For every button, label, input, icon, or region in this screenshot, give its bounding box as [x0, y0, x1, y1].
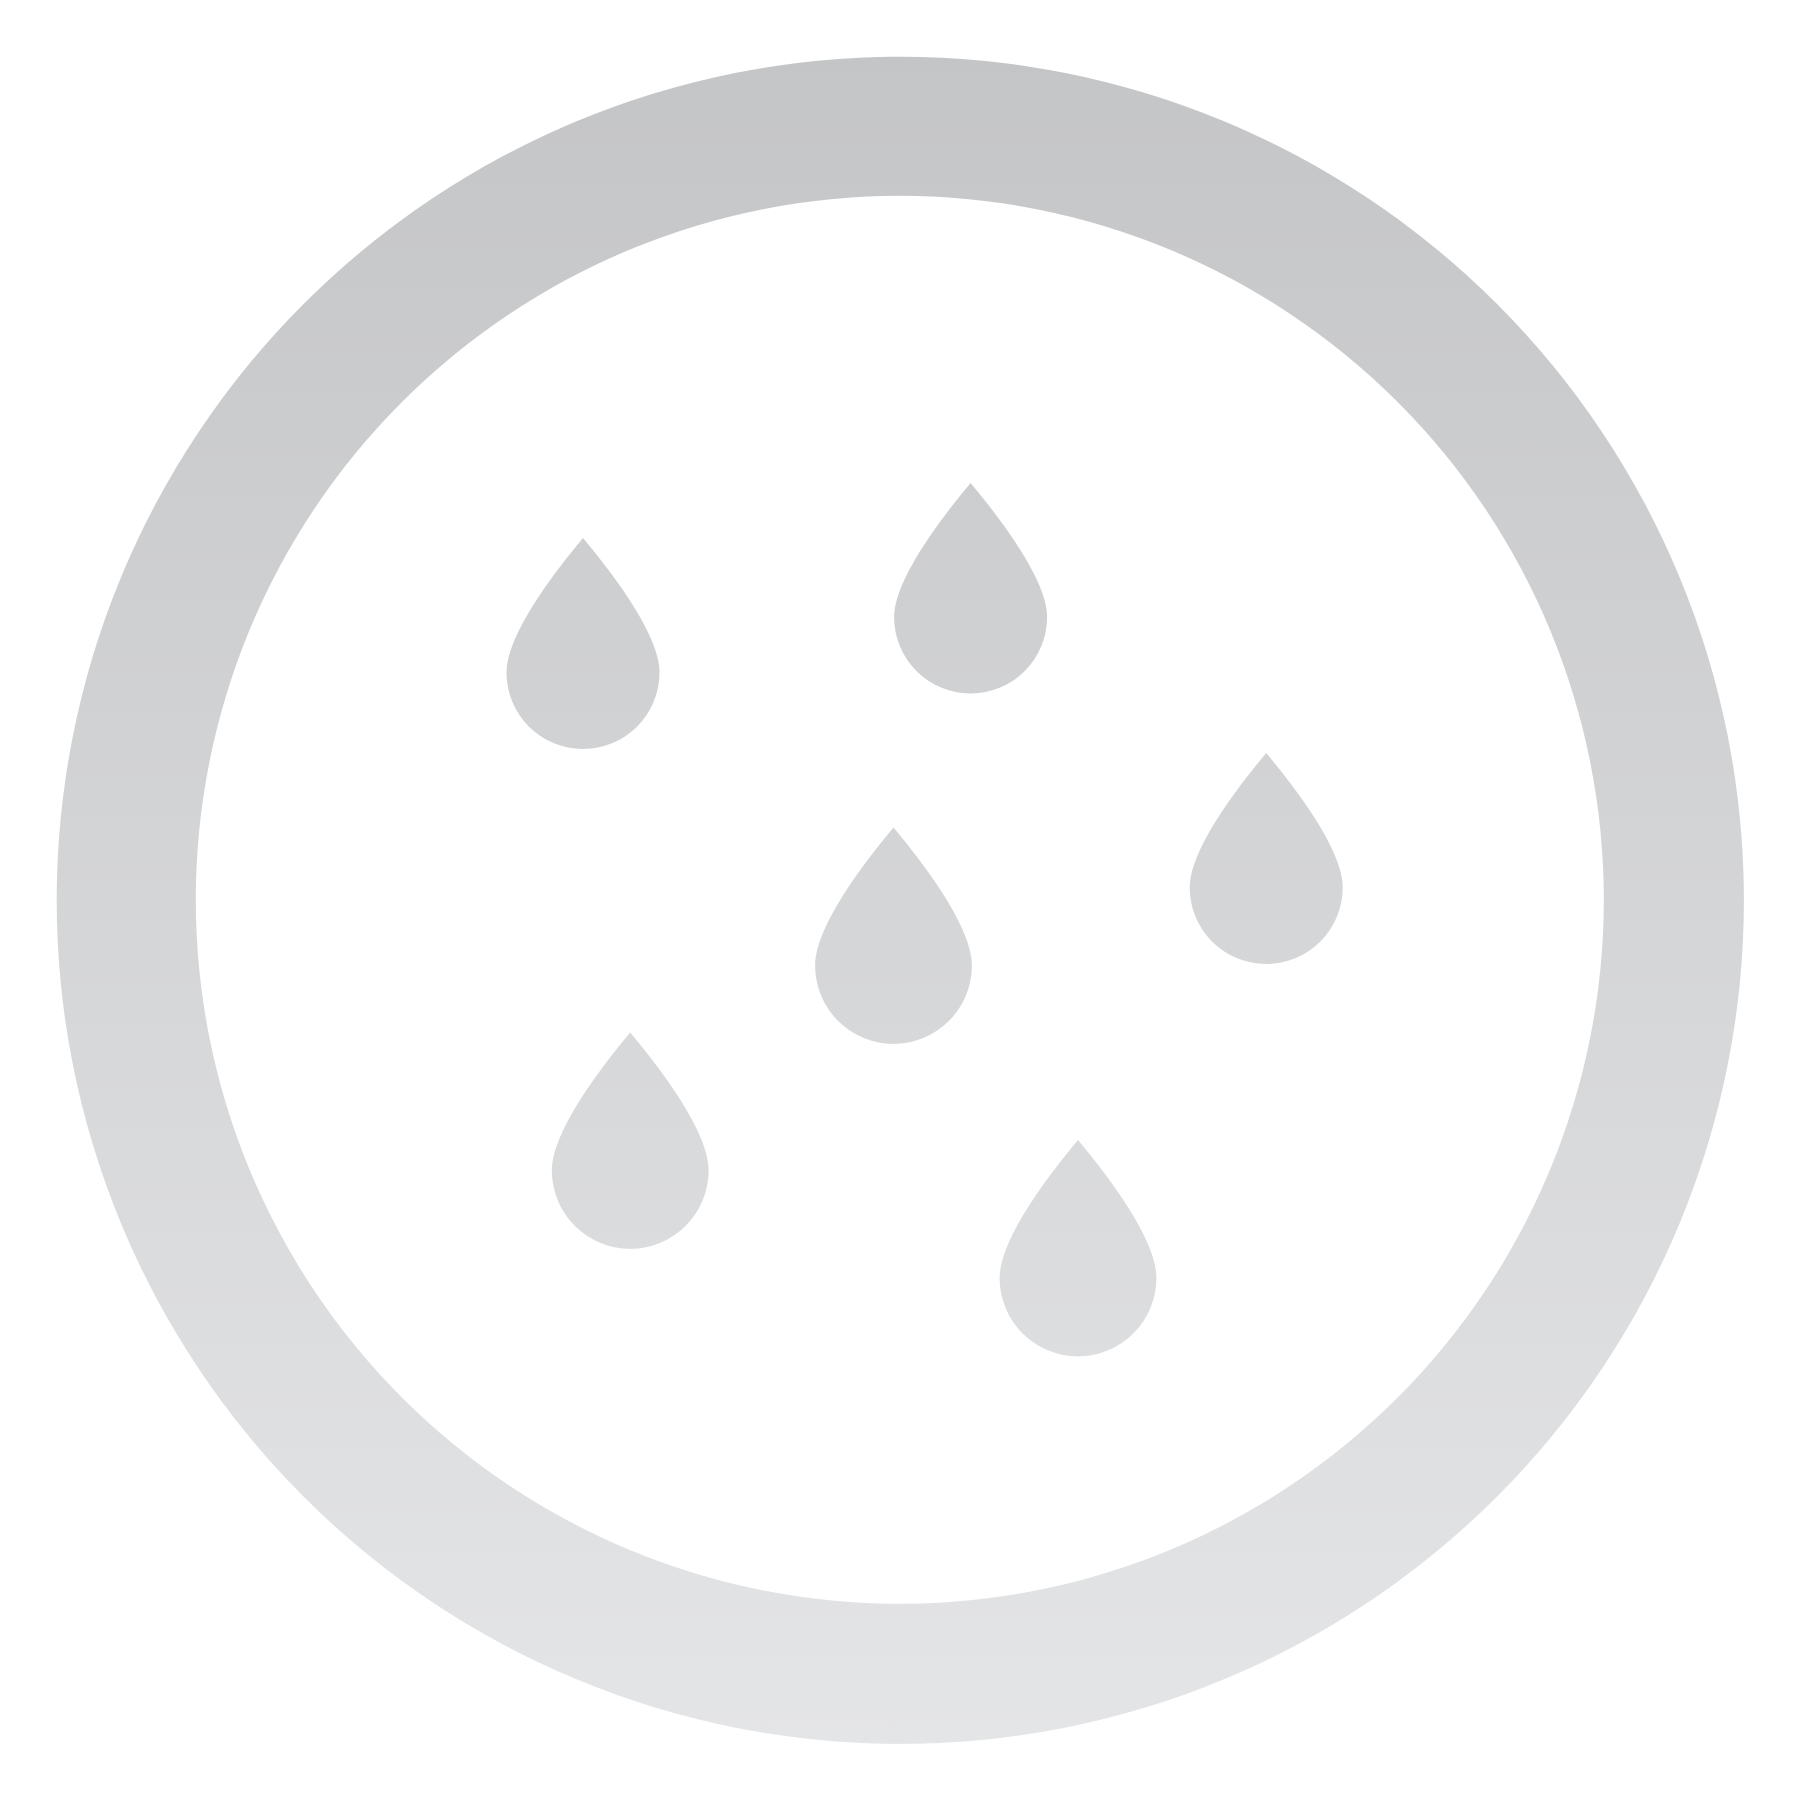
drop: upper centre: [894, 483, 1047, 694]
drop: right: [1190, 753, 1343, 964]
drop: lower centre: [1000, 1140, 1156, 1356]
drop: centre: [815, 828, 972, 1044]
drop: lower left: [552, 1032, 709, 1249]
drop: upper left: [506, 538, 660, 749]
